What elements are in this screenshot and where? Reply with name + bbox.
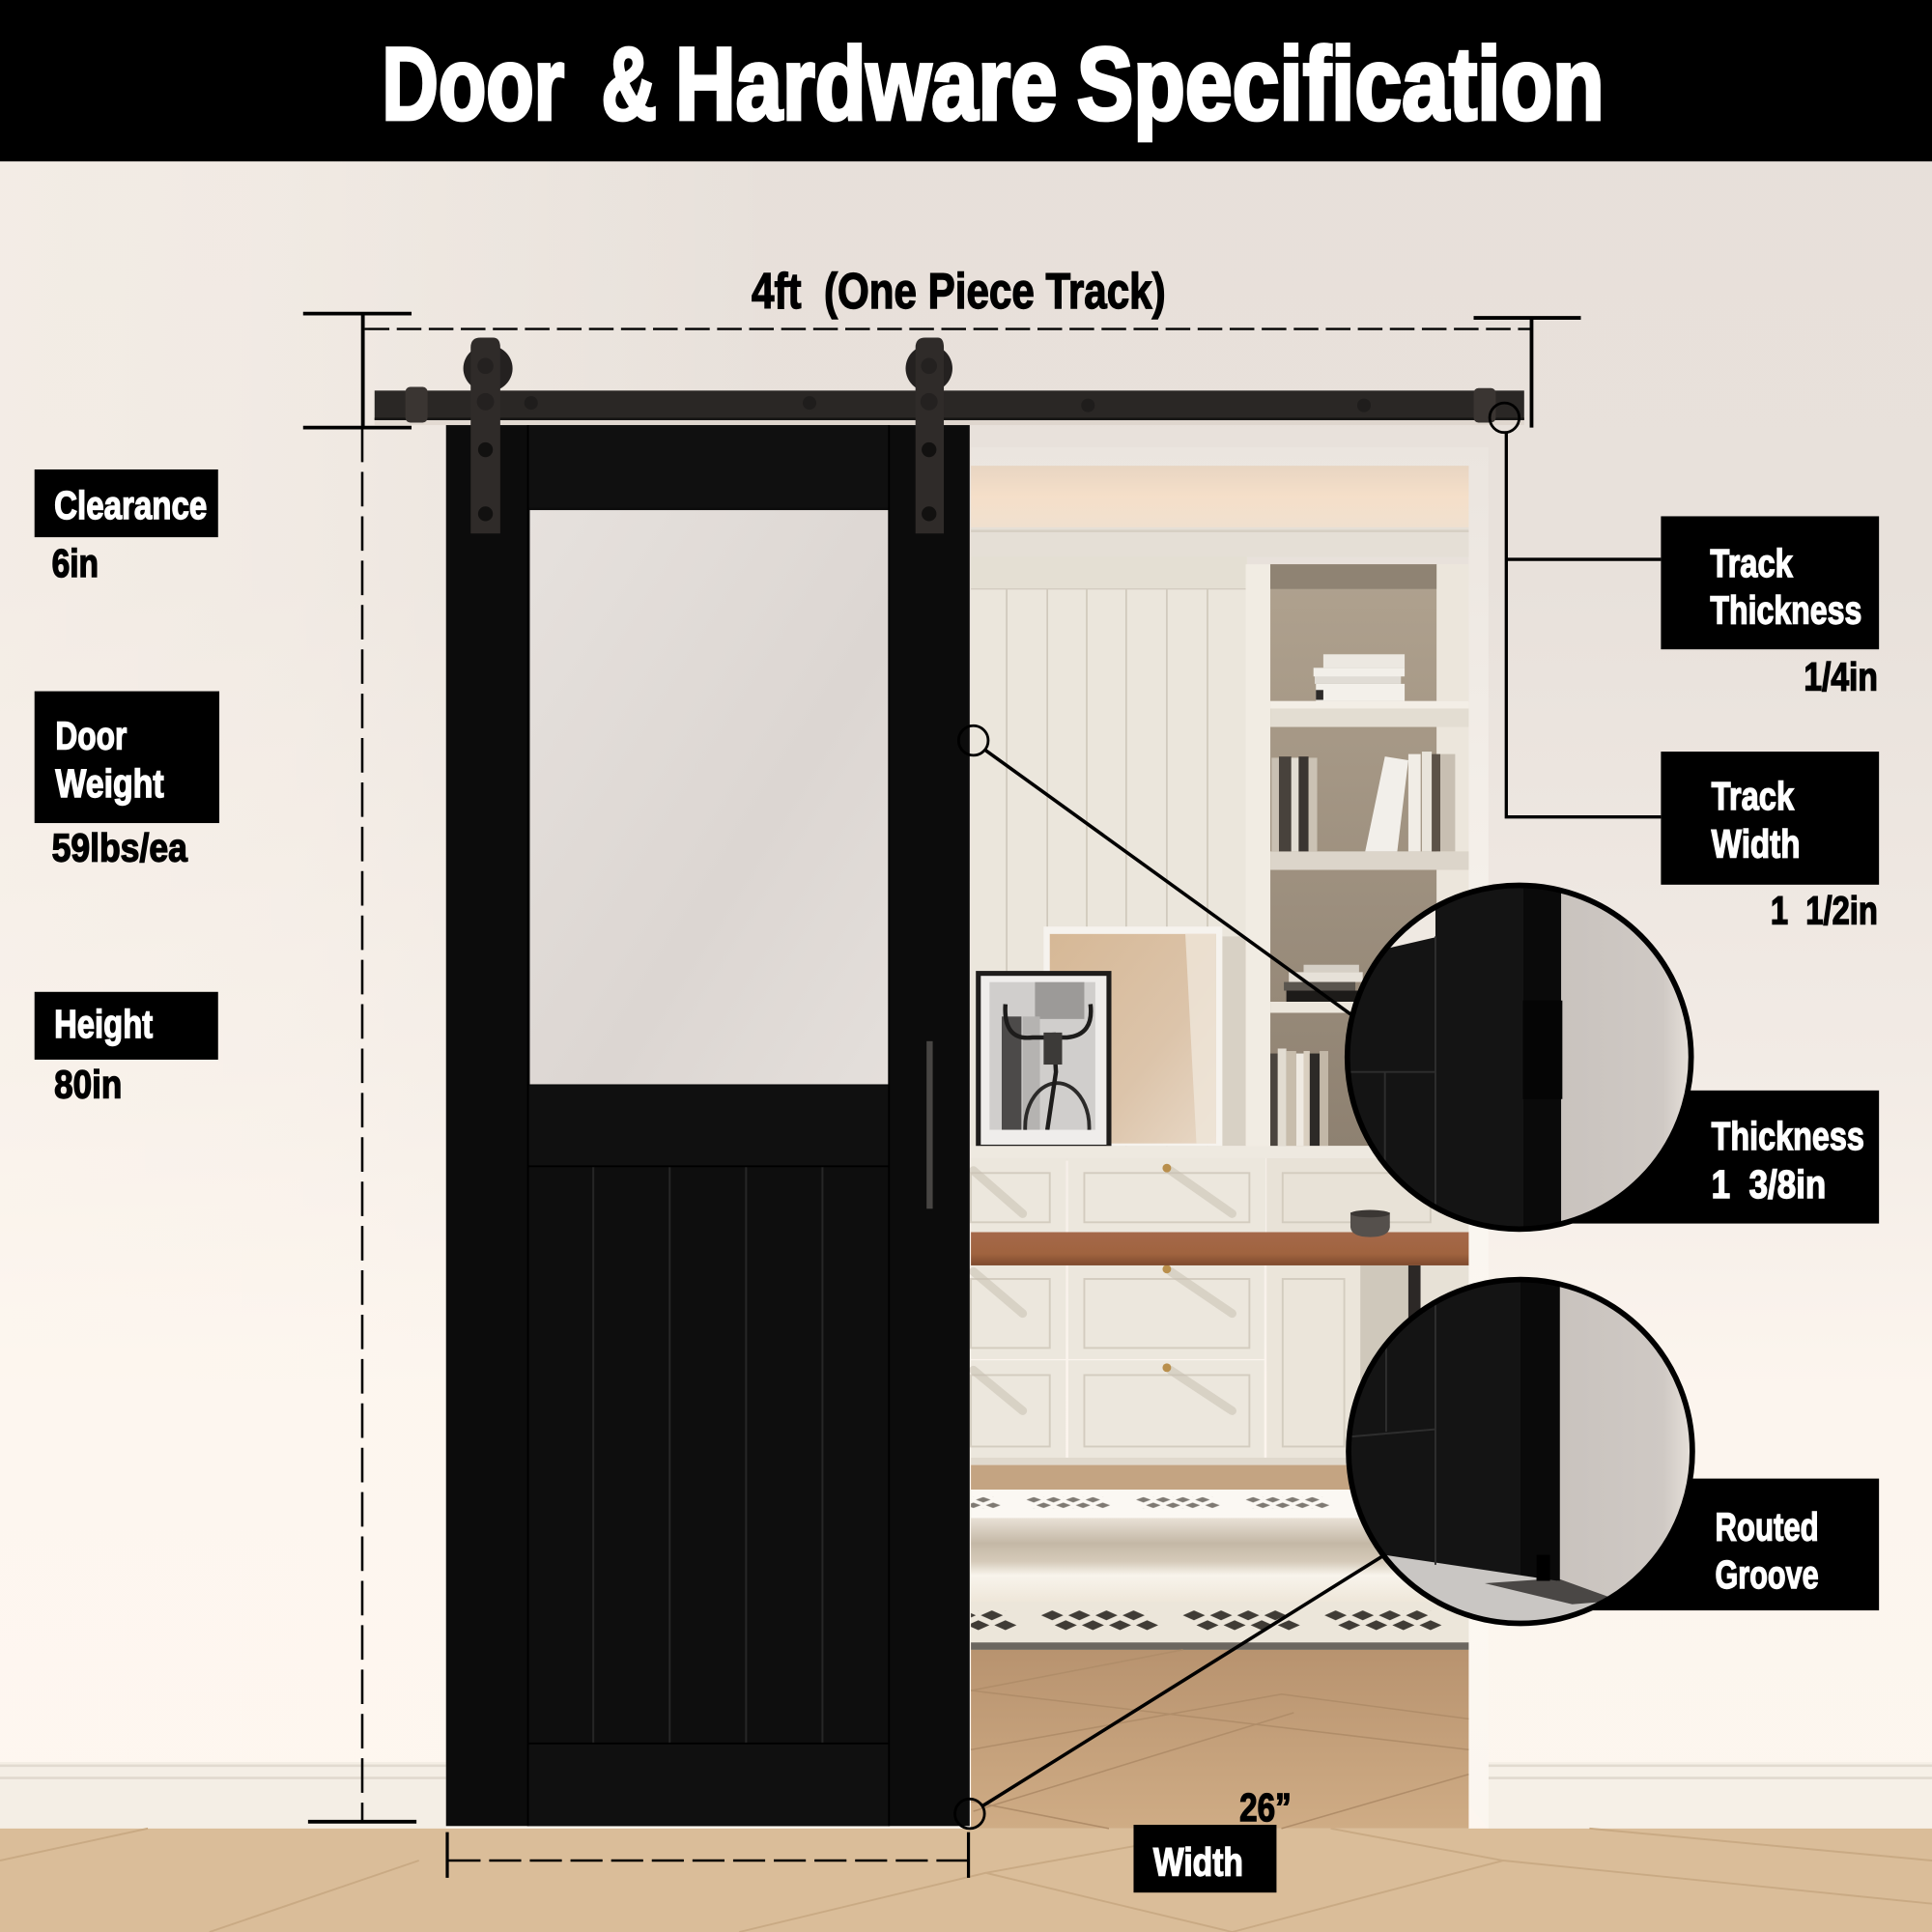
label: door weight: Door: [55, 714, 127, 758]
label: height: Height: [54, 1002, 153, 1046]
art: large beige print: [1043, 926, 1246, 1146]
label: track width: [1661, 752, 1879, 933]
books: fourth shelf: [1270, 1048, 1328, 1146]
plank panels: [527, 425, 890, 1826]
thickness leader: [985, 751, 1350, 1014]
label: track thickness: Track: [1710, 541, 1793, 585]
label: door weight: 59lbs/ea: [52, 826, 187, 870]
height cap: [308, 1820, 416, 1823]
track leader lines: [1506, 433, 1661, 817]
height dashed line: [361, 428, 363, 1821]
label: door weight: [35, 692, 219, 870]
title: Door: [382, 26, 564, 142]
track clearance bracket: [303, 313, 412, 428]
label: door weight: Weight: [55, 761, 164, 806]
door handle: [926, 1041, 933, 1208]
right track bracket: [1474, 318, 1580, 428]
books: top shelf: [1314, 654, 1405, 701]
wheel stop left: [406, 387, 428, 423]
label: clearance: [35, 469, 218, 585]
books: second shelf: [1271, 752, 1455, 851]
inner wood floor: [971, 1650, 1468, 1829]
label: thickness: Thickness: [1712, 1114, 1864, 1158]
magnifier: routed groove detail: [1343, 1275, 1700, 1633]
hanger strap right: [906, 337, 952, 533]
label: clearance: Clearance: [54, 483, 207, 527]
label: width: 26”: [1239, 1785, 1292, 1830]
label: track width: Width: [1712, 822, 1801, 867]
dimension lines: [303, 313, 1580, 1878]
title bar: [0, 0, 1932, 161]
barn door: [446, 425, 970, 1826]
desk top and cup: [971, 1210, 1468, 1265]
barn track: [375, 387, 1524, 425]
label: track thickness: 1/4in: [1804, 654, 1878, 698]
hanger strap left: [464, 337, 513, 533]
rails: [527, 425, 890, 508]
label: track thickness: [1661, 516, 1879, 698]
ceiling glow: [971, 466, 1468, 527]
door casing: [971, 447, 1489, 1829]
wheel stop right: [1474, 388, 1495, 423]
title: Specification: [1077, 26, 1605, 142]
label: routed groove: Groove: [1716, 1552, 1819, 1597]
groove marker circle: [955, 1799, 984, 1829]
bookcase: [1246, 564, 1468, 1146]
label: track width: 1 1/2in: [1771, 889, 1878, 933]
cabinets: [971, 1146, 1468, 1458]
thickness marker circle: [958, 725, 988, 755]
glass window: [529, 510, 889, 1084]
title: &: [601, 26, 657, 142]
track marker circle: [1490, 403, 1520, 433]
crown moulding: [971, 527, 1468, 557]
label: track thickness: Thickness: [1710, 587, 1861, 632]
callout lines and markers: [955, 403, 1661, 1829]
groove leader: [982, 1556, 1382, 1806]
track length dashed line: [365, 328, 1531, 330]
room interior through the doorway: [971, 447, 1489, 1829]
door slab: [446, 425, 970, 1826]
label: routed groove: [1565, 1479, 1879, 1610]
baseboard: [0, 1762, 1932, 1829]
track bolts: [525, 396, 1371, 412]
label: thickness: 1 3/8in: [1712, 1162, 1826, 1207]
label: thickness: [1547, 1091, 1879, 1224]
label: width: Width: [1153, 1839, 1243, 1884]
label: height: [35, 992, 218, 1106]
label: width: [1133, 1785, 1292, 1892]
label: clearance: 6in: [52, 541, 99, 585]
books: third shelf: [1284, 965, 1363, 1002]
track length label: 4ft (One Piece Track): [752, 264, 1166, 320]
label: height: 80in: [54, 1062, 122, 1106]
width dimension: [447, 1833, 969, 1878]
art: framed bicycle photo: [976, 971, 1111, 1146]
panelled wall: [971, 557, 1247, 1161]
title: Hardware: [675, 26, 1057, 142]
magnifier: door thickness detail: [1343, 881, 1700, 1238]
floor strip and rug: [971, 1458, 1468, 1650]
floor: [0, 1829, 1932, 1932]
title: [382, 26, 1605, 142]
label: track width: Track: [1712, 774, 1794, 818]
label: routed groove: Routed: [1716, 1504, 1819, 1548]
